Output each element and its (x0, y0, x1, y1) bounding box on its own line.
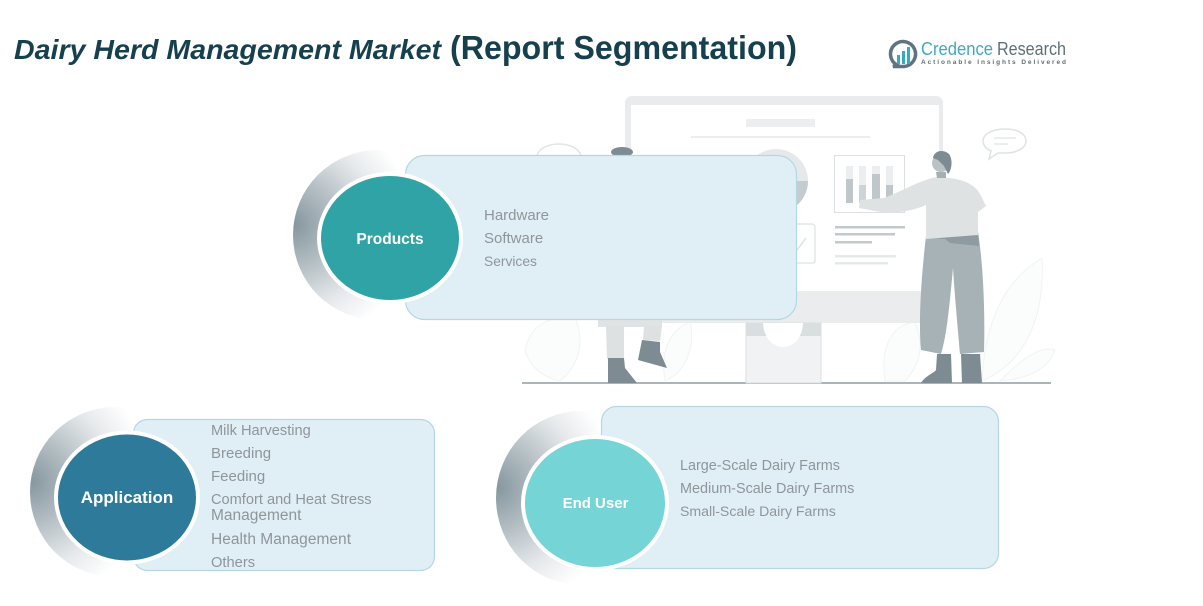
crescent accent (30, 407, 200, 577)
icon: logo mark (891, 42, 916, 66)
legs (606, 326, 662, 359)
products list: Services (484, 254, 537, 269)
crescent accent (496, 411, 666, 585)
ground line (522, 382, 1051, 384)
leaves background (525, 258, 1055, 381)
shoes (921, 354, 982, 383)
end user list: Small-Scale Dairy Farms (680, 503, 836, 519)
end user list: Large-Scale Dairy Farms (680, 458, 840, 474)
circle: End User: End User (563, 495, 629, 512)
person left (598, 147, 667, 383)
application list: Others (211, 555, 255, 571)
application list: Feeding (211, 468, 265, 485)
circle: Products: Products (356, 231, 424, 248)
application list (211, 423, 372, 571)
pie chart (744, 149, 808, 213)
person right (859, 151, 986, 383)
application list: Breeding (211, 445, 271, 462)
shoes (608, 340, 667, 383)
products list: Hardware (484, 207, 549, 224)
circle: Application: Application (81, 488, 173, 507)
end user list (680, 458, 854, 519)
application list: Management (211, 507, 302, 524)
logo tagline: Actionable Insights Delivered (921, 59, 1066, 66)
application list: Health Management (211, 531, 352, 548)
monitor stand (746, 323, 821, 383)
products list: Software (484, 230, 543, 247)
hair (611, 147, 633, 157)
bar chart card (834, 156, 904, 212)
illustration: analyst presenting at monitor (522, 96, 1055, 384)
checkbox card (770, 224, 815, 263)
logo: Credence Research (891, 39, 1066, 66)
speech bubble right (983, 129, 1026, 159)
trousers (920, 232, 984, 354)
end user list: Medium-Scale Dairy Farms (680, 481, 854, 497)
text lines on screen (835, 226, 905, 264)
products list (484, 207, 549, 269)
panel background (134, 420, 434, 570)
circle: End User (523, 437, 667, 569)
crescent accent (293, 150, 463, 320)
head (932, 151, 952, 178)
panel: end user (496, 406, 998, 585)
circle: Application (56, 432, 198, 562)
panel background (602, 406, 998, 568)
logo: Credence Research: Research (997, 39, 1066, 59)
title: Dairy Herd Management Market (14, 34, 443, 65)
speech bubble left (537, 144, 581, 170)
circle: Products (319, 174, 461, 302)
logo wordmark: Credence (921, 39, 993, 59)
screen heading bar (746, 119, 815, 127)
panel: products (293, 150, 796, 320)
application list: Milk Harvesting (211, 423, 311, 439)
torso and arm (859, 177, 986, 239)
application list: Comfort and Heat Stress (211, 492, 372, 508)
title (14, 29, 797, 66)
screen subtitle line (691, 136, 870, 138)
monitor frame (625, 96, 943, 296)
title: (Report Segmentation) (450, 29, 797, 66)
panel background (406, 156, 796, 320)
monitor screen (631, 105, 939, 291)
trouser waist (926, 232, 979, 246)
monitor chin (600, 291, 942, 323)
panel: application (30, 407, 434, 577)
skirt hem (598, 320, 662, 327)
